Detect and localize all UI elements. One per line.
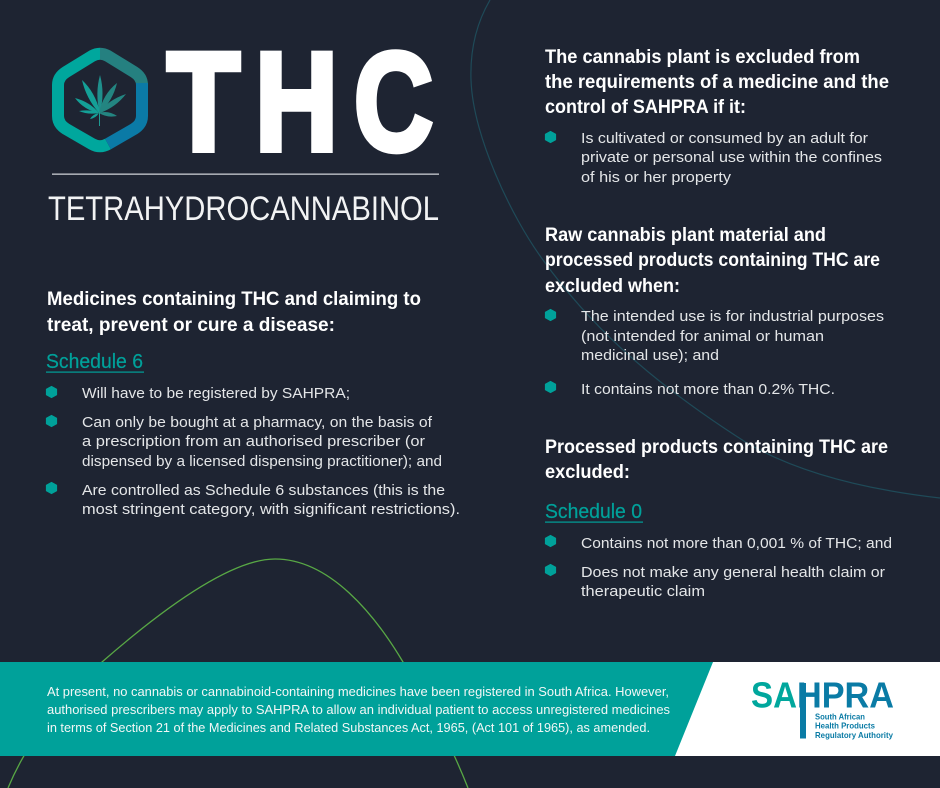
panel: processed products exclusion xyxy=(545,437,892,600)
bullet: pharmacy: Can only be bought at a pharmacy, on the basis of xyxy=(82,414,433,431)
bullet: registered: Will have to be registered by SAHPRA; xyxy=(82,385,350,402)
bullet: no health claim xyxy=(546,564,885,600)
heading: processed products: Processed products containing THC are xyxy=(545,437,888,458)
divider rule xyxy=(52,174,439,175)
panel: medicines containing THC xyxy=(46,289,460,518)
bullet: personal use: of his or her property xyxy=(581,169,732,186)
bullet: industrial: medicinal use); and xyxy=(581,347,719,364)
bullet: no health claim: therapeutic claim xyxy=(581,583,705,600)
subtitle: TETRAHYDROCANNABINOL: TETRAHYDROCANNABINOL xyxy=(48,190,439,228)
title: THC xyxy=(167,23,433,180)
logo: SAHPRA: Health Products xyxy=(815,720,875,730)
bullet: personal use: Is cultivated or consumed by an adult for xyxy=(581,130,868,147)
subheading: Schedule 0: Schedule 0 xyxy=(545,501,642,523)
header: THC logo and title xyxy=(48,23,439,228)
white logo panel xyxy=(675,662,940,756)
bullet: schedule 6 control: most stringent category, with significant restrictions). xyxy=(82,501,460,518)
bullet: schedule 6 control: Are controlled as Schedule 6 substances (this is the xyxy=(82,482,445,499)
bullet: personal use xyxy=(546,130,882,186)
icon: cannabis leaf xyxy=(75,75,126,126)
bullet: no health claim: Does not make any general health claim or xyxy=(581,564,885,581)
heading: raw material: Raw cannabis plant material and xyxy=(545,225,826,246)
bullet: pharmacy xyxy=(46,414,442,470)
footer text: At present, no cannabis or cannabinoid-containing medicines have been registered in South Africa. However, xyxy=(47,684,669,699)
title: THC: C xyxy=(354,23,433,180)
footer band xyxy=(0,662,940,756)
icon: hexagon with cannabis leaf xyxy=(58,54,142,146)
heading: raw material: excluded when: xyxy=(545,276,680,297)
bullet: schedule 6 control xyxy=(46,482,460,518)
panel: raw plant material exclusion xyxy=(545,225,884,398)
footer text: authorised prescribers may apply to SAHPRA to allow an individual patient to access unregistered medicines xyxy=(47,702,670,717)
heading: medicines: treat, prevent or cure a disease: xyxy=(47,315,335,336)
bullet: pharmacy: dispensed by a licensed dispensing practitioner); and xyxy=(82,453,442,470)
heading: plant exclusion: control of SAHPRA if it: xyxy=(545,97,746,118)
footer text: in terms of Section 21 of the Medicines and Related Substances Act, 1965, (Act 101 of 1965), as amended. xyxy=(47,720,650,735)
bullet: pharmacy: a prescription from an authorised prescriber (or xyxy=(82,433,425,450)
decorative curve: teal arc xyxy=(471,0,940,498)
heading: medicines: Medicines containing THC and claiming to xyxy=(47,289,421,310)
title: THC: H xyxy=(255,23,338,180)
logo: SAHPRA: HPRA xyxy=(797,674,894,716)
subheading: Schedule 6: Schedule 6 xyxy=(46,351,143,373)
panel: cannabis plant exclusion xyxy=(545,47,889,186)
heading: processed products: excluded: xyxy=(545,462,630,483)
bullet: 0.2% THC: It contains not more than 0.2% THC. xyxy=(581,381,835,398)
title: THC: T xyxy=(167,23,240,180)
heading: raw material: processed products containing THC are xyxy=(545,250,880,271)
bullet: industrial: The intended use is for industrial purposes xyxy=(581,308,884,325)
logo: SAHPRA: SA xyxy=(751,674,797,716)
logo: SAHPRA xyxy=(751,674,894,740)
bullet: 0,001%: Contains not more than 0,001 % of THC; and xyxy=(581,535,892,552)
bullet: industrial xyxy=(546,308,884,364)
logo: SAHPRA: South African xyxy=(815,712,865,722)
heading: plant exclusion: the requirements of a medicine and the xyxy=(545,72,889,93)
bullet: personal use: private or personal use within the confines xyxy=(581,149,882,166)
heading: plant exclusion: The cannabis plant is excluded from xyxy=(545,47,860,68)
decorative curve: green arc xyxy=(8,559,468,788)
bullet: industrial: (not intended for animal or human xyxy=(581,328,824,345)
logo: SAHPRA: Regulatory Authority xyxy=(815,730,893,740)
